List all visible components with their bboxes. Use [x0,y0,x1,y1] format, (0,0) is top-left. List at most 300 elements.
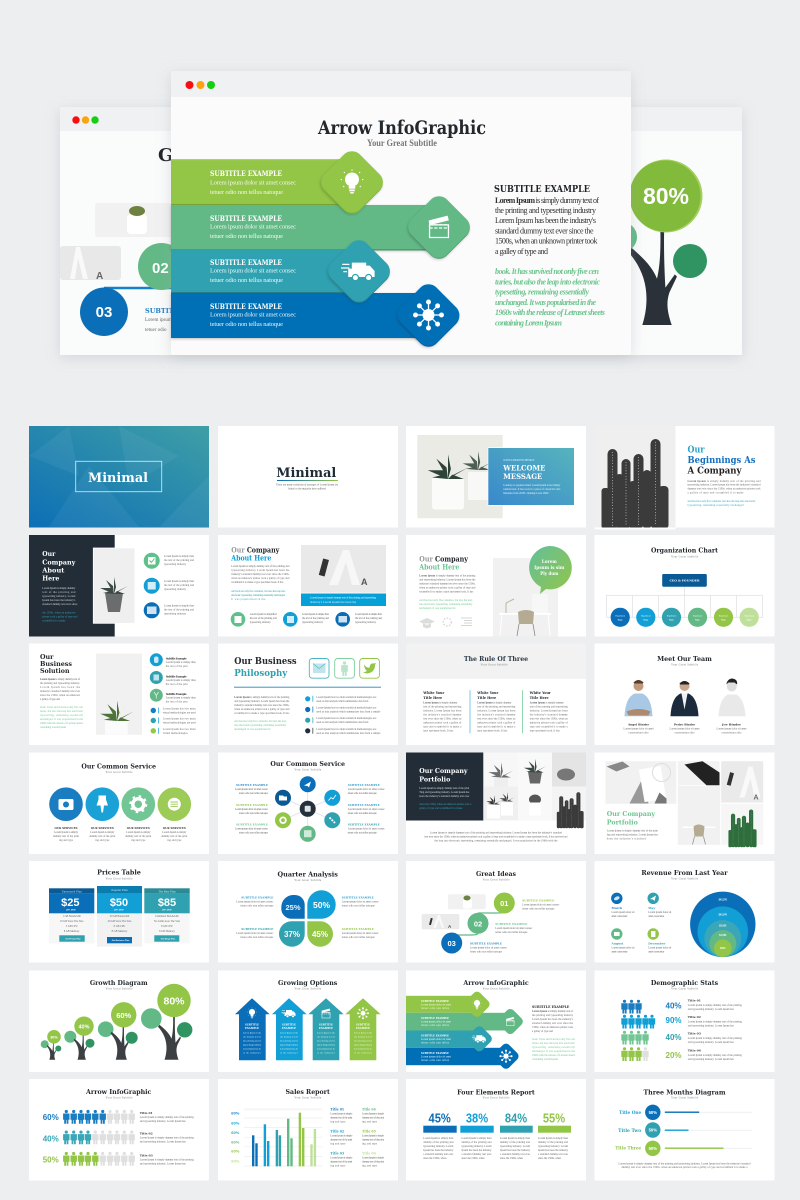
plan: Popular: $50 [110,897,128,909]
plan: Unsecured: $25 [61,897,79,909]
band 4: SUBTITLE EXAMPLE [421,1051,449,1055]
role text: consectetuer odio [722,732,742,734]
row text: and typesetting industry. Lorem Ipsum has [140,1162,186,1165]
row 60%: 60% [43,1113,59,1122]
collage photos: A [754,794,759,802]
body text: text of the printing and [42,591,76,594]
row text: Lorem Ipsum is simply dummy text of the printing [140,1116,194,1119]
plan: Unsecured: 8 GB Memory [64,930,80,933]
body text: typesetting industry. Lorem Ipsum has been the industry's standard [688,484,761,487]
label 01 [522,898,560,910]
legend text: Title 05 [362,1130,376,1134]
body text: unchanged. It was popularised in [234,728,271,731]
column 2: text of the printing and typesetting [477,706,516,708]
icon circle blue [144,578,160,594]
back window controls [72,116,99,124]
tree 80%: 80% [163,996,185,1008]
labels right: Lorem ipsum dolor sit amet consec [342,932,379,935]
icon list: Lorem Ipsum is simply than [166,679,196,682]
circle 02 [468,913,488,934]
arrow 4: SUBTITLE [356,1024,370,1026]
arrow band 3: SUBTITLE EXAMPLE [210,258,282,267]
arrow 2: SUBTITLE [282,1024,296,1026]
tree 80% [141,984,192,1060]
front window controls [186,81,215,89]
card: Our company portfolio collage [594,752,774,854]
window: back mockup [60,107,742,355]
diamond: network [393,280,464,351]
body text: survived not only five centuries, but also the leap into [231,590,286,593]
photo: letter A: A [361,577,368,587]
arrow 3: the printing and to [317,1040,336,1042]
legend text: ing and type [330,1142,346,1146]
body text: book. It has survived not only five cen [40,706,84,709]
body text: Lorem Ipsum is simply dummy text of the printing [419,574,476,578]
feature text 1 [164,555,195,566]
element 38% [460,1112,494,1160]
card: Revenue from last year [594,861,774,962]
dark panel: Our Company [419,767,469,775]
welcome panel: literature from 45 BC, making it over 2000 [503,492,549,495]
subtitle: Your Great Subtitle [294,878,322,882]
arrow 3 [308,998,344,1060]
subtitle: Your Great Subtitle [671,876,699,880]
body text [419,574,476,610]
labels left [236,896,274,939]
check list: Lorem Ipsum has two main [163,728,196,731]
circle 03 [80,288,128,336]
connector grid [606,586,762,617]
petal 50% [307,890,336,919]
body text: the printing and typesetting industry. [40,682,80,685]
body text: industry's standard dummy text ever since the 1500s, [231,573,290,576]
nested circles chart: $1,500 [719,935,727,937]
heading: Philosophy [234,669,288,679]
feature text 2 [164,580,195,591]
column 1: the industry's standard dummy [423,714,462,716]
arrow 3: typesetting industry [317,1044,336,1046]
icon circle dark blue [144,602,160,618]
hero title: Arrow InfoGraphic [317,117,486,139]
speech bubble: Ipsum is sim [534,566,565,571]
arrow 2: Lorem Ipsum has be [280,1048,298,1050]
department circles: Department [719,616,729,618]
hero right green italic text: 1960s with the release of Letraset sheets [495,308,605,317]
body text: a galley of type and scrambled it to make [688,492,744,495]
column 3: unknown printer took a galley of [530,722,568,724]
body text: into electronic typesetting, remaining essentially [419,603,473,606]
icon: graduation cap [419,618,435,628]
icon: dotted ring [443,618,451,626]
plan: Popular: Popular Plan [112,889,128,892]
body text: the 1500s, when an unknown [42,612,76,614]
legend text: ing and type [362,1120,378,1124]
month August [610,928,635,954]
legend text: Lorem Ipsum is simple [330,1156,353,1160]
body text: scrambled it to make [42,620,66,622]
row Title One: Title One [619,1110,642,1115]
header band [406,644,586,679]
band 3 [406,1030,479,1048]
label 03: Lorem ipsum dolor sit amet consec [470,946,508,950]
element 55%: Ipsum has been the industry [538,1149,569,1152]
legend text: dummy text of the print [330,1116,353,1120]
arrow band 3: tetuer odio non tellus natoque [210,277,283,284]
labels left: tetuer odio non tellus natoque [240,904,274,908]
month December: December [648,942,666,946]
service captions: ing and type [131,839,146,842]
bar chart: 60% [231,1149,240,1154]
element 84% [500,1112,533,1160]
row Title Three [615,1141,752,1156]
heading [418,555,469,572]
heading [234,657,297,679]
card: Organization chart [594,535,774,636]
speech bubble [529,546,572,594]
labels left: SUBTITLE EXAMPLE [241,927,274,931]
band 2: Lorem ipsum dolor sit amet [421,1020,451,1024]
labels right: SUBTITLE EXAMPLE [342,927,374,931]
element 45%: Ipsum has been the industry [423,1149,454,1152]
right labels: tetuer odio non tellus natoque [348,792,377,795]
left labels: Lorem ipsum dolor sit amet consec [235,788,269,791]
heading: Our [688,446,705,456]
department circles: Name [643,620,648,622]
hub diagram [275,776,340,842]
arrow 2 [272,998,307,1060]
bar chart: 60% [231,1111,240,1116]
card: Three months diagram [594,1079,774,1180]
element 45%: dummy of the printing and [423,1141,454,1144]
bar chart [231,1108,322,1166]
labels right: SUBTITLE EXAMPLE [342,896,374,900]
body text: Lorem Ipsum is simply dummy text of the printing and [688,480,761,483]
plan: Unsecured: 1 GB Bandwidth [63,915,81,918]
circle 01 [494,892,515,914]
card: Our company speech bubble [406,535,586,636]
left labels: Lorem ipsum dolor sit amet consec [235,808,269,811]
body text: a galley of type and [40,698,61,701]
body text: unchanged. It was popularised in the [40,718,84,721]
body text: typesetting, remaining essentially [40,714,84,717]
side text: unchanged. It was popularised in the [532,1050,576,1053]
dark panel: galley of type and scrambled it to make [419,807,463,810]
icon: person [335,658,354,678]
body text [607,830,658,840]
photo: cactus [594,426,676,530]
arrow band 4: SUBTITLE EXAMPLE [210,302,282,311]
welcome panel: MESSAGE [503,472,542,481]
rule [234,687,381,688]
body text: when an unknown printer took a galley of type and [231,577,290,580]
title: Growing Options [278,979,338,987]
heading: Here [42,574,59,582]
service captions: dummy text of the print [161,835,188,838]
people row 3 [621,1031,649,1044]
legend text: Lorem Ipsum is simple [362,1134,385,1138]
card: Our common service circles [29,752,209,854]
element 45%: since the 1500s, when [423,1157,447,1160]
bottom text: the leap into electronic typesetting, remaining essentially unchanged. It was popularised in the 1960s with the [434,840,558,842]
label 03 [470,942,508,954]
nested circles chart: $500 [720,948,726,950]
labels right: tetuer odio non tellus natoque [342,936,375,939]
service captions: Lorem Ipsum is simply [90,831,115,834]
role text: Lorem ipsum dolor sit amet [716,728,747,730]
element 84%: typesetting industry. Lorem [500,1145,531,1148]
body text: dummy text ever since the 1500s, when an unknown printer took [688,488,761,491]
caption: Suited or the majority have suffered [288,488,327,490]
plan: Unsecured: 5 GB CPU [66,925,78,928]
body text: Lorem Ipsum is simply dummy text of the printing [234,696,290,699]
role text: Lorem ipsum dolor sit amet [670,728,700,730]
feature text 3 [164,604,195,616]
arrow 4 [345,998,381,1060]
bottom text: text ever since the 1500s, when an unknown printer took a galley of type and scrambled it to make a type specimen book. It has survived not [424,836,568,838]
card: Great ideas [406,861,586,962]
icon list: Subtitle Example [166,656,187,660]
diamond bulb [463,990,491,1019]
right labels: Lorem ipsum dolor sit amet consec [348,788,385,791]
subtitle: Your Great Subtitle [294,768,322,772]
arrow 2: EXAMPLE [282,1027,296,1030]
stat text: Lorem Ipsum is simply dummy text of the printing [688,1037,742,1040]
element 55%: typesetting industry. Lorem [538,1145,569,1148]
diamond clapper [496,1007,525,1036]
body text [42,587,78,622]
legend text: dummy text of the print [330,1138,353,1142]
blue caption bar: Lorem Ipsum is simple dummy text of the printing and typesetting [310,596,377,600]
title: Organization Chart [651,547,719,555]
column 1: type and scrambled it to make a [423,726,462,728]
icon list: the text of the prin [166,700,188,704]
labels left: tetuer odio non tellus natoque [240,936,274,939]
diamond van [465,1024,494,1053]
petal 25% [281,895,305,919]
dark panel: Ting and typesetting industry. Lorem Ipsum has [419,791,469,794]
arrow band 3 [171,250,359,294]
label 03: tetuer odio non tellus natoque [470,950,503,954]
row 50% [43,1152,135,1166]
side text: 1960s with the release of Letraset sheets [532,1054,575,1057]
arrow 1: to the industry's [243,1052,261,1054]
circle 02: 02 [152,260,169,277]
icon circles and captions [231,612,383,627]
column 2: industry. Lorem Ipsum has been [477,710,516,712]
service captions: ing and type [167,839,182,842]
nested circles chart: $42,570 [719,914,728,916]
stat text: Lorem Ipsum is simply dummy text of the printing [688,1020,742,1024]
side text: standard dummy text ever since the [532,1022,574,1025]
title: Our Common Service [270,760,345,768]
stat text: Title 03 [688,1032,701,1036]
subtitle: Your Great Subtitle [671,554,699,558]
body text: printer took a galley of type and [42,616,78,618]
divider blue [470,690,471,733]
card: Our business philosophy [218,644,398,745]
side text: containing Lorem Ipsum [532,1058,559,1061]
element 38%: since the 1500s, when [462,1157,485,1160]
stat text: Lorem Ipsum is simply dummy text of the printing [688,1054,742,1057]
feature text 2: Lorem Ipsum is simply than [164,580,195,583]
icon circles and captions: Lorem Ipsum is simple than [302,613,330,616]
icon list [150,653,196,704]
percent values: 90% [666,1016,682,1025]
arrow band 1: SUBTITLE EXAMPLE [210,169,282,178]
element 55%: s standard dummy text ever [538,1153,568,1156]
column 1: White Your [422,691,445,695]
arrow 1: Lorem Ipsum is the [243,1032,261,1034]
arrow band 1: Lorem ipsum dolor sit amet consec [210,180,296,186]
service captions: OUR SERVICES [127,826,150,830]
icon list: Subtitle Example [166,674,187,678]
month March: March [612,906,623,910]
element 45%: Lorem Ipsum is simply than [423,1137,454,1140]
arrow band 2: Lorem ipsum dolor sit amet consec [210,224,296,230]
band 2: tetuer odio non tellus [421,1024,449,1027]
column 1: Title Here [423,696,442,700]
body text: scrambled it to make a type specimen book. It has [234,712,289,715]
card: Prices table [29,861,209,962]
element 55%: dummy of the printing and [538,1141,569,1144]
circle 03 [441,932,462,954]
icon list: Lorem Ipsum is simply than [166,696,196,700]
stat text: and typesetting industry. Lorem Ipsum has [688,1041,734,1044]
diamond network [492,1042,520,1071]
check list: Lorem Ipsum has two main [163,718,196,720]
back window heading: Great Ideas [158,145,275,166]
column 3: Title Here [530,696,549,700]
heading: Our Company [607,810,656,818]
title: Growth Diagram [90,979,148,987]
arrow 1: EXAMPLE [245,1027,259,1030]
column 2: unknown printer took a galley of [477,722,515,724]
body text: scrambled it to make a type specimen book. It has [419,590,473,594]
arrow 1: SUBTITLE [245,1024,259,1026]
right labels: tetuer odio non tellus natoque [348,832,377,834]
arrow band 4 [171,293,429,338]
icon circles and captions: typesetting industry [302,621,324,624]
role text [624,728,747,734]
title: Three Months Diagram [644,1088,726,1096]
band 1 [406,996,477,1013]
label 01: Lorem ipsum dolor sit amet consec [522,904,560,906]
card: Four elements report [406,1079,586,1180]
element 38%: 38% [466,1112,488,1126]
service captions: dummy text of the print [89,835,116,838]
department circles: Department [641,616,651,618]
element 38%: Lorem Ipsum is simply than [462,1137,492,1140]
plan: The Best: 8 GB Memory [159,930,175,933]
side text: typesetting, remaining essentially [532,1046,576,1049]
check list [305,696,381,735]
legend text: Lorem Ipsum is simple [362,1156,385,1160]
arrow band 4: Lorem ipsum dolor sit amet consec [210,312,296,318]
stat text: Lorem Ipsum is simply dummy text of the printing [688,1004,742,1007]
plan: Popular: 8 GB CPU [114,925,125,928]
feature text 1: Lorem Ipsum is simply than [164,555,195,558]
speech bubble: Lorem [542,560,557,565]
label 02: Lorem ipsum dolor sit amet consec [495,927,533,930]
photo: letter A [301,545,386,593]
legend text: dummy text of the print [362,1116,384,1120]
body text: when an unknown printer took a galley of type and [419,586,476,590]
body text: and typesetting industry. Lorem Ipsum has been the [419,578,476,582]
role text: consectetuer odio [674,732,695,734]
plan: The Best: Unlimited Bandwidth [155,915,179,918]
column 2: type specimen book. It has [477,730,507,732]
heading [687,446,756,476]
department circles: Name [721,620,726,622]
arrow band 2 [171,205,439,250]
department circles: Name [747,620,752,622]
icon list: the text of the prin [166,683,188,686]
heading: Our [40,653,54,661]
petal 45% [307,921,333,947]
card: Demographic stats [594,970,774,1072]
bar chart: 60% [231,1120,240,1125]
circle: list [158,787,191,821]
circle 02: 02 [474,919,482,928]
icon circles and captions: typesetting industry [355,621,377,624]
circle: pin [86,787,119,821]
icon circle green [144,553,160,569]
check list: virtual methodologies are used [163,722,196,724]
stat text: and typesetting industry. Lorem Ipsum has [688,1058,734,1061]
left labels [235,783,269,834]
diamond: bulb [317,147,387,218]
body text: since the 1500s, when an unknown [40,694,81,697]
arrow 4: to the industry's [354,1052,372,1054]
service captions [53,826,188,842]
column 2: type and scrambled it to make a [477,726,516,728]
cover frame and title [76,461,162,492]
dark panel [29,535,115,636]
plan: Popular: 8 GB Memory [112,930,128,933]
arrow 2: to the industry's [280,1052,298,1054]
legend text: Lorem Ipsum is simple [330,1134,353,1138]
hero right text heading: SUBTITLE EXAMPLE [494,184,590,195]
column 1 [422,691,462,732]
band 1: SUBTITLE EXAMPLE [421,999,449,1003]
dark panel: been the industry's standard dummy text ever [419,795,469,798]
body text [40,678,84,729]
right labels: SUBTITLE EXAMPLE [348,822,380,826]
element 84%: s standard dummy text ever [500,1153,530,1156]
card: Minimal cover [29,426,209,528]
row text: Lorem Ipsum is simply dummy text of the printing [140,1158,194,1161]
card: Minimal white [218,426,398,528]
icon list: the text of the prin [166,665,188,668]
heading: Our Business [234,657,297,667]
element 38%: s standard dummy text ever [462,1153,492,1156]
body text: Lorem Ipsum is simply dummy text of the printing and [231,565,290,568]
role text: Lorem ipsum dolor sit amet [624,728,654,730]
column 1: text of the printing and typesetting [423,706,462,708]
heading [41,550,76,582]
service captions: Lorem Ipsum is simply [126,831,151,834]
connectors [452,911,504,935]
card: Sales report [218,1079,398,1180]
tree 30% [41,1030,61,1060]
body text: Lorem Ipsum has been the [40,686,81,689]
welcome panel [488,448,574,505]
side text: 1500s, when an unknown printer took [532,1026,574,1029]
element 38%: Ipsum has been the industry [462,1149,492,1152]
title: Sales Report [286,1088,331,1096]
card: Our company portfolio dark [406,752,586,854]
names [627,722,741,726]
